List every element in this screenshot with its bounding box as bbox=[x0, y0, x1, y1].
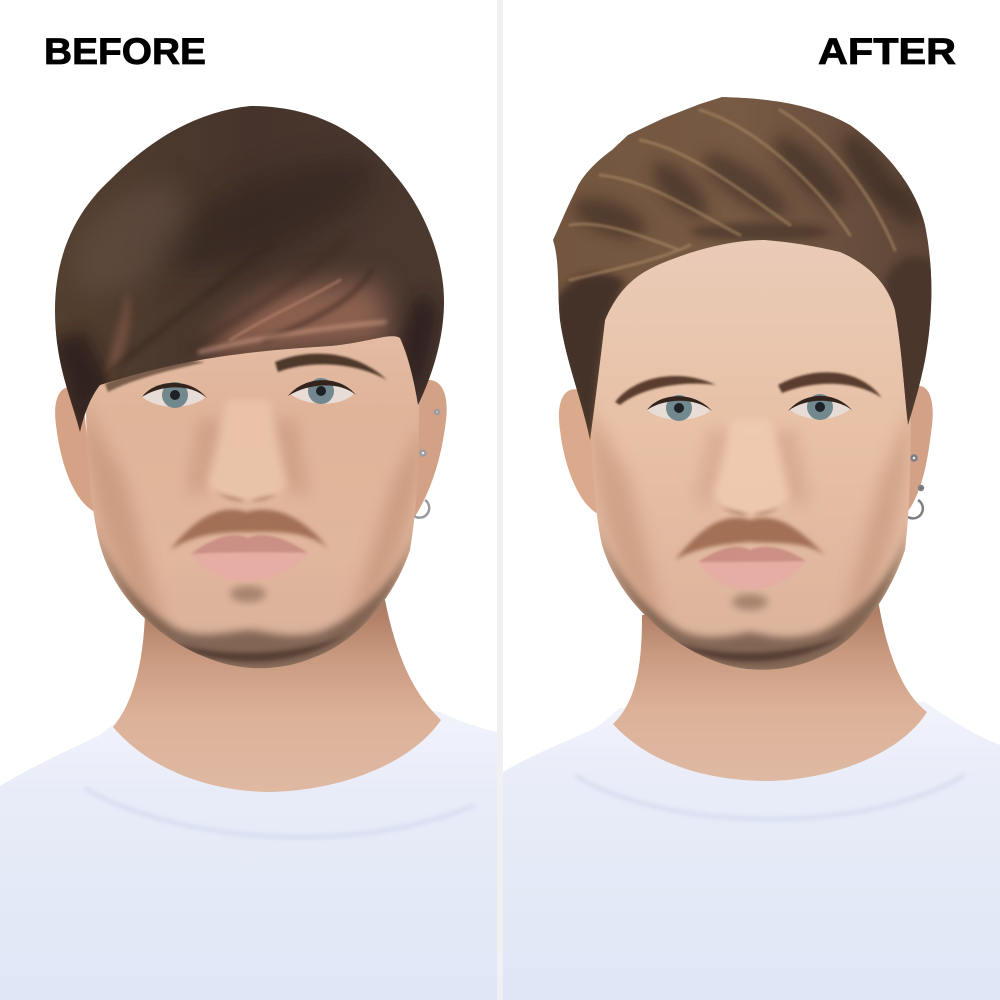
before: left fringe reddish strand bbox=[105, 290, 130, 378]
after: face bbox=[590, 225, 911, 670]
after: face shading and stubble bbox=[585, 400, 915, 674]
before: dark crown patch bbox=[165, 159, 372, 272]
before: fringe strands bbox=[104, 270, 388, 377]
before: right eyebrow bbox=[275, 354, 387, 380]
after: right eyebrow bbox=[778, 372, 882, 398]
before: hair bbox=[55, 106, 444, 432]
after: earrings bbox=[908, 456, 923, 518]
after: right ear bbox=[908, 386, 933, 510]
before: fringe reddish glow bbox=[200, 280, 392, 358]
after: hair bbox=[545, 85, 940, 445]
after: soul patch bbox=[732, 594, 768, 610]
before: lips bbox=[191, 535, 308, 582]
before: neck bbox=[113, 600, 441, 792]
after: jaw stubble bbox=[592, 520, 912, 674]
after: moustache bbox=[675, 518, 826, 560]
after: hair base bbox=[545, 85, 940, 445]
before: moustache bbox=[170, 510, 328, 550]
before: cheek shading bbox=[86, 415, 418, 624]
before: left ear bbox=[55, 387, 95, 512]
after: lower right dark side bbox=[885, 256, 940, 430]
before: soft grey sheen bbox=[80, 190, 189, 288]
panel: before portrait bbox=[0, 90, 497, 1000]
before: t-shirt bbox=[0, 708, 497, 1000]
before: jaw stubble bbox=[98, 532, 412, 668]
after: t-shirt bbox=[503, 702, 1000, 1000]
heading: after: AFTER bbox=[818, 31, 956, 72]
panel: after portrait bbox=[503, 85, 1000, 1000]
panel divider bbox=[497, 0, 503, 1000]
before: face bbox=[86, 336, 419, 668]
after: left ear bbox=[559, 389, 600, 515]
before: earrings bbox=[414, 410, 439, 518]
before: hair base bbox=[55, 106, 444, 432]
before: dark lower sides bbox=[50, 290, 440, 440]
after: nose bbox=[714, 420, 788, 516]
before: face shading and stubble bbox=[86, 415, 418, 668]
after: lips bbox=[698, 547, 806, 590]
after: light hair strands bbox=[570, 110, 895, 280]
heading: before: BEFORE bbox=[44, 31, 206, 72]
after: collar seam bbox=[575, 775, 965, 819]
after: cheek shading bbox=[591, 413, 910, 619]
after: dark hair patches bbox=[569, 127, 933, 246]
before: nose bbox=[208, 400, 286, 502]
before: collar seam bbox=[85, 788, 475, 837]
before: right eye bbox=[288, 378, 356, 404]
after: neck bbox=[613, 600, 927, 781]
before: left eyebrow bbox=[105, 361, 205, 392]
before: chin edge dark bbox=[165, 635, 345, 662]
after: right eye bbox=[788, 394, 852, 420]
after: left eye bbox=[647, 395, 712, 421]
after: lower left dark side bbox=[555, 273, 625, 445]
before: right ear bbox=[414, 380, 447, 518]
before: soul patch bbox=[230, 586, 266, 602]
after: left eyebrow bbox=[615, 376, 716, 405]
before: nose side shading bbox=[188, 420, 308, 495]
after: chin edge dark bbox=[668, 635, 845, 662]
after: nose side shading bbox=[696, 430, 808, 505]
before: left eye bbox=[142, 382, 207, 408]
